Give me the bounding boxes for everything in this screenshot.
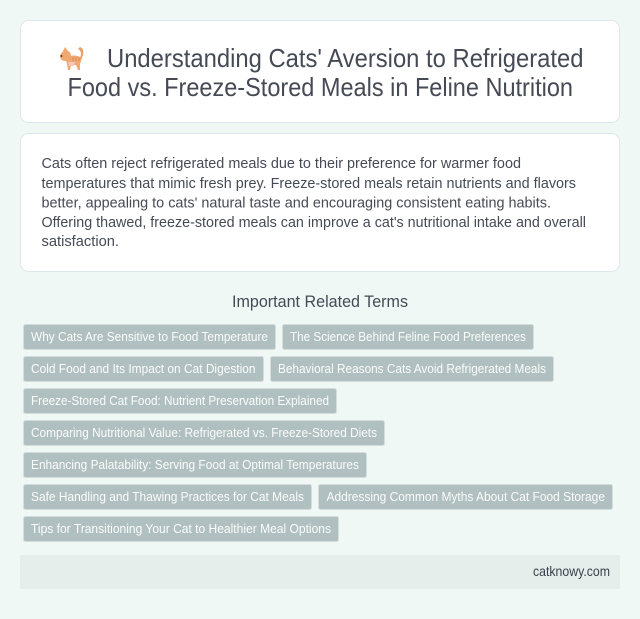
heading: related terms: Important Related Terms [232,293,408,311]
chip [24,356,264,382]
chip: Why Cats Are Sensitive to Food Temperature [31,329,268,344]
chip [24,516,338,542]
panel: summary text: temperatures that mimic fresh prey. Freeze-stored meals retain nutrients and flavors [42,175,576,192]
chip [24,388,336,414]
panel: summary text [20,134,620,272]
chip: Cold Food and Its Impact on Cat Digestion [31,361,256,376]
chip [318,484,612,510]
title: Understanding Cats' Aversion to Refrigerated [107,45,584,73]
chip: Comparing Nutritional Value: Refrigerated vs. Freeze-Stored Diets [31,425,377,440]
chip [282,324,534,350]
chip: Freeze-Stored Cat Food: Nutrient Preservation Explained [31,393,329,408]
chip [270,356,554,382]
title: Food vs. Freeze-Stored Meals in Feline Nutrition [68,74,573,102]
chip [24,324,276,350]
chip: Addressing Common Myths About Cat Food Storage [326,489,605,504]
footer bar: catknowy.com [533,564,610,579]
chip [24,452,366,478]
panel: title card [20,20,620,122]
chip: The Science Behind Feline Food Preferences [290,329,526,344]
icon: orange cat [60,47,83,70]
panel: summary text: satisfaction. [42,233,119,250]
title [68,45,584,102]
chip [24,484,312,510]
chip: Tips for Transitioning Your Cat to Healthier Meal Options [31,521,331,536]
term chips [24,324,612,542]
panel: summary text: Offering thawed, freeze-stored meals can improve a cat's nutritional intake and overall [42,214,586,231]
chip: Enhancing Palatability: Serving Food at Optimal Temperatures [31,457,359,472]
chip [24,420,384,446]
panel: summary text: better, appealing to cats' natural taste and encouraging consistent eating habits. [42,194,551,212]
chip: Behavioral Reasons Cats Avoid Refrigerated Meals [278,361,546,376]
panel: summary text: Cats often reject refrigerated meals due to their preference for warmer food [42,155,521,172]
footer bar [20,555,620,589]
chip: Safe Handling and Thawing Practices for Cat Meals [31,489,304,504]
